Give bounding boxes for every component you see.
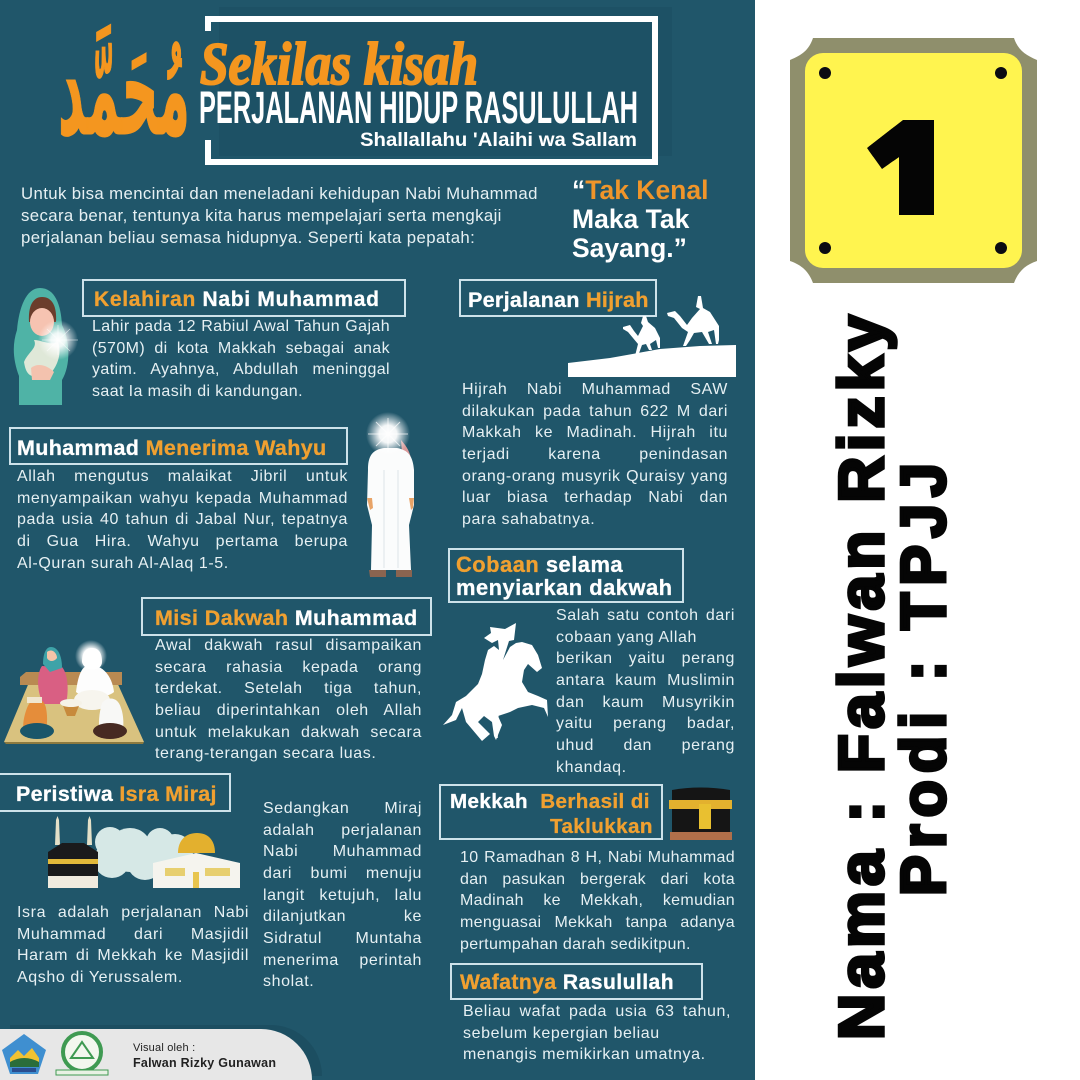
body text: Salah satu contoh dari: [556, 607, 735, 624]
icon: Kaaba: [669, 788, 732, 840]
heading: menyiarkan dakwah: [456, 575, 673, 600]
body text: Allah mengutus malaikat Jibril untuk: [17, 468, 348, 485]
body text: Makkah ke Madinah. Hijrah itu: [462, 424, 728, 441]
body text: yaitu perang badar,: [556, 715, 735, 732]
subtitle: Shallallahu Alaihi wa Sallam: Shallallahu 'Alaihi wa Sallam: [360, 130, 637, 151]
heading: [459, 279, 657, 317]
body text: Hijrah Nabi Muhammad SAW: [462, 381, 728, 398]
text: Miraj: adalah perjalanan: [263, 822, 422, 839]
credit text: [133, 1042, 276, 1070]
body text: menguasai Mekkah tanpa adanya: [460, 914, 735, 931]
body text: khandaq.: [556, 759, 627, 776]
body text: di Gua Hira. Wahyu pertama berupa: [17, 533, 348, 550]
text: Miraj: Nabi Muhammad: [263, 843, 422, 860]
panel: Muhammad Menerima Wahyu: [9, 412, 414, 577]
title: Sekilas kisah: Sekilas kisah: [200, 31, 478, 97]
study program: Prodi : TPJJ: [889, 456, 959, 896]
body text: [462, 381, 728, 528]
icon: mother holding baby: [14, 288, 78, 405]
body text: Beliau wafat pada usia 63 tahun,: [463, 1003, 731, 1020]
body text: terang-terangan secara luas.: [155, 745, 376, 762]
body text: para sahabatnya.: [462, 511, 595, 528]
body text: dilakukan pada tahun 622 M dari: [462, 403, 728, 420]
body text: antara kaum Muslimin: [556, 672, 735, 689]
quote: Sayang.”: [572, 233, 687, 263]
icon: camels crossing a dune: [568, 296, 736, 377]
body text: menyampaikan wahyu kepada Muhammad: [17, 490, 348, 507]
heading: Muhammad Menerima Wahyu: [17, 436, 327, 460]
body text: [463, 1003, 731, 1063]
panel: Cobaan selama menyiarkan dakwah: [443, 548, 735, 776]
heading: Wafatnya Rasulullah: [460, 971, 674, 994]
heading: Kelahiran Nabi Muhammad: [94, 288, 380, 311]
body text: uhud dan perang: [556, 737, 735, 754]
body text: luar biasa terhadap Nabi dan: [462, 489, 728, 506]
body text: orang-orang musyrik Quraisy yang: [462, 468, 728, 485]
body text: cobaan yang Allah: [556, 629, 697, 646]
panel: Mekkah Berhasil di Taklukkan: [439, 784, 735, 953]
body text: berikan yaitu perang: [556, 650, 735, 667]
intro text: perjalanan beliau semasa hidupnya. Seperti kata pepatah:: [21, 228, 475, 247]
heading: Peristiwa Isra Miraj: [16, 782, 217, 806]
quote: Maka Tak: [572, 204, 689, 234]
body text: terdekat. Setelah tiga tahun,: [155, 680, 422, 697]
panel: Wafatnya Rasulullah: [450, 963, 731, 1063]
name: Nama : Falwan Rizky: [827, 310, 897, 1040]
title frame: [205, 16, 658, 165]
heading: [9, 427, 348, 465]
credit text: Falwan Rizky Gunawan: [133, 1056, 276, 1070]
text: Isra: Muhammad dari Masjidil: [17, 926, 249, 943]
body text: untuk melakukan dakwah secara: [155, 724, 422, 741]
body text: pertumpahan darah sedikitpun.: [460, 936, 691, 953]
text: Isra: Isra adalah perjalanan Nabi: [17, 904, 249, 921]
heading: Perjalanan Hijrah: [468, 287, 649, 312]
logo: blue pentagon crest: [2, 1034, 46, 1074]
text: Miraj: Sedangkan Miraj: [263, 800, 422, 817]
icon: gathering on a prayer mat: [4, 640, 144, 744]
text: Isra: Aqsho di Yerussalem.: [17, 969, 183, 986]
heading: Cobaan selama: [456, 552, 623, 577]
badge: number 1 card: [790, 38, 1037, 283]
number: 1: [858, 94, 942, 262]
body text: (570M) di kota Makkah sebagai anak: [92, 340, 390, 357]
quote: [572, 175, 708, 263]
heading: [439, 784, 663, 840]
body text: yatim. Ayahnya, Abdullah meninggal: [92, 361, 390, 378]
panel: Peristiwa Isra Miraj: [0, 773, 422, 990]
text: Miraj: sholat.: [263, 973, 314, 990]
panel: infographic poster: [0, 0, 755, 1080]
panel: Kelahiran Nabi Muhammad: [14, 279, 406, 405]
body text: [17, 468, 348, 572]
icon: Kaaba, clouds and Dome of the Rock: [48, 816, 240, 888]
text: Miraj: dilanjutkan ke: [263, 908, 422, 925]
text: Miraj: menerima perintah: [263, 952, 422, 969]
body text: beliau diperintahkan oleh Allah: [155, 702, 422, 719]
body text: Al-Quran surah Al-Alaq 1-5.: [17, 555, 229, 572]
heading: [450, 963, 703, 1000]
body text: Awal dakwah rasul disampaikan: [155, 637, 422, 654]
body text: dan kaum Musyrikin: [556, 694, 735, 711]
name and study program, rotated text: [827, 310, 959, 1040]
text: Miraj: Sidratul Muntaha: [263, 930, 422, 947]
credit text: Visual oleh :: [133, 1042, 195, 1054]
intro text: Untuk bisa mencintai dan meneladani kehidupan Nabi Muhammad: [21, 184, 538, 203]
body text: Madinah ke Mekkah, kemudian: [460, 892, 735, 909]
body text: [155, 637, 422, 762]
footer credit bar: [0, 1029, 312, 1080]
text: Isra: [17, 904, 249, 986]
body text: 10 Ramadhan 8 H, Nabi Muhammad: [460, 849, 735, 866]
panel: Misi Dakwah Muhammad: [4, 597, 432, 762]
title block: مُحَمَّد: [58, 13, 190, 165]
title block: [58, 13, 658, 165]
heading: [141, 597, 432, 636]
panel: Perjalanan Hijrah: [459, 279, 736, 528]
heading: Taklukkan: [550, 815, 653, 838]
heading: Mekkah Berhasil di: [450, 790, 650, 813]
body text: pada usia 40 tahun di Jabal Nur, tepatnya: [17, 511, 348, 528]
icon: horse rider with flag: [443, 623, 548, 741]
intro text: [21, 184, 538, 247]
heading: [0, 773, 231, 812]
quote: “Tak Kenal: [572, 175, 708, 205]
heading: [448, 548, 684, 603]
body text: saat Ia masih di kandungan.: [92, 383, 303, 400]
body text: secara rahasia kepada orang: [155, 659, 422, 676]
body text: [460, 849, 735, 953]
text: Miraj: [263, 800, 422, 990]
icon: man in white robe: [366, 412, 414, 577]
body text: sebelum kepergian beliau: [463, 1025, 660, 1042]
heading: [82, 279, 406, 317]
body text: menangis memikirkan umatnya.: [463, 1046, 706, 1063]
text: Miraj: langit ketujuh, lalu: [263, 887, 422, 904]
body text: terjadi karena penindasan: [462, 446, 728, 463]
text: Isra: Haram di Mekkah ke Masjidil: [17, 947, 249, 964]
body text: Lahir pada 12 Rabiul Awal Tahun Gajah: [92, 318, 390, 335]
body text: dan pasukan bergerak dari kota: [460, 871, 735, 888]
body text: [556, 607, 735, 776]
logo: green round seal: [56, 1031, 108, 1076]
text: Miraj: dari bumi menuju: [263, 865, 422, 882]
body text: [92, 318, 390, 400]
intro text: secara benar, tentunya kita harus mempelajari serta mengkaji: [21, 206, 502, 225]
heading: Misi Dakwah Muhammad: [155, 606, 417, 630]
